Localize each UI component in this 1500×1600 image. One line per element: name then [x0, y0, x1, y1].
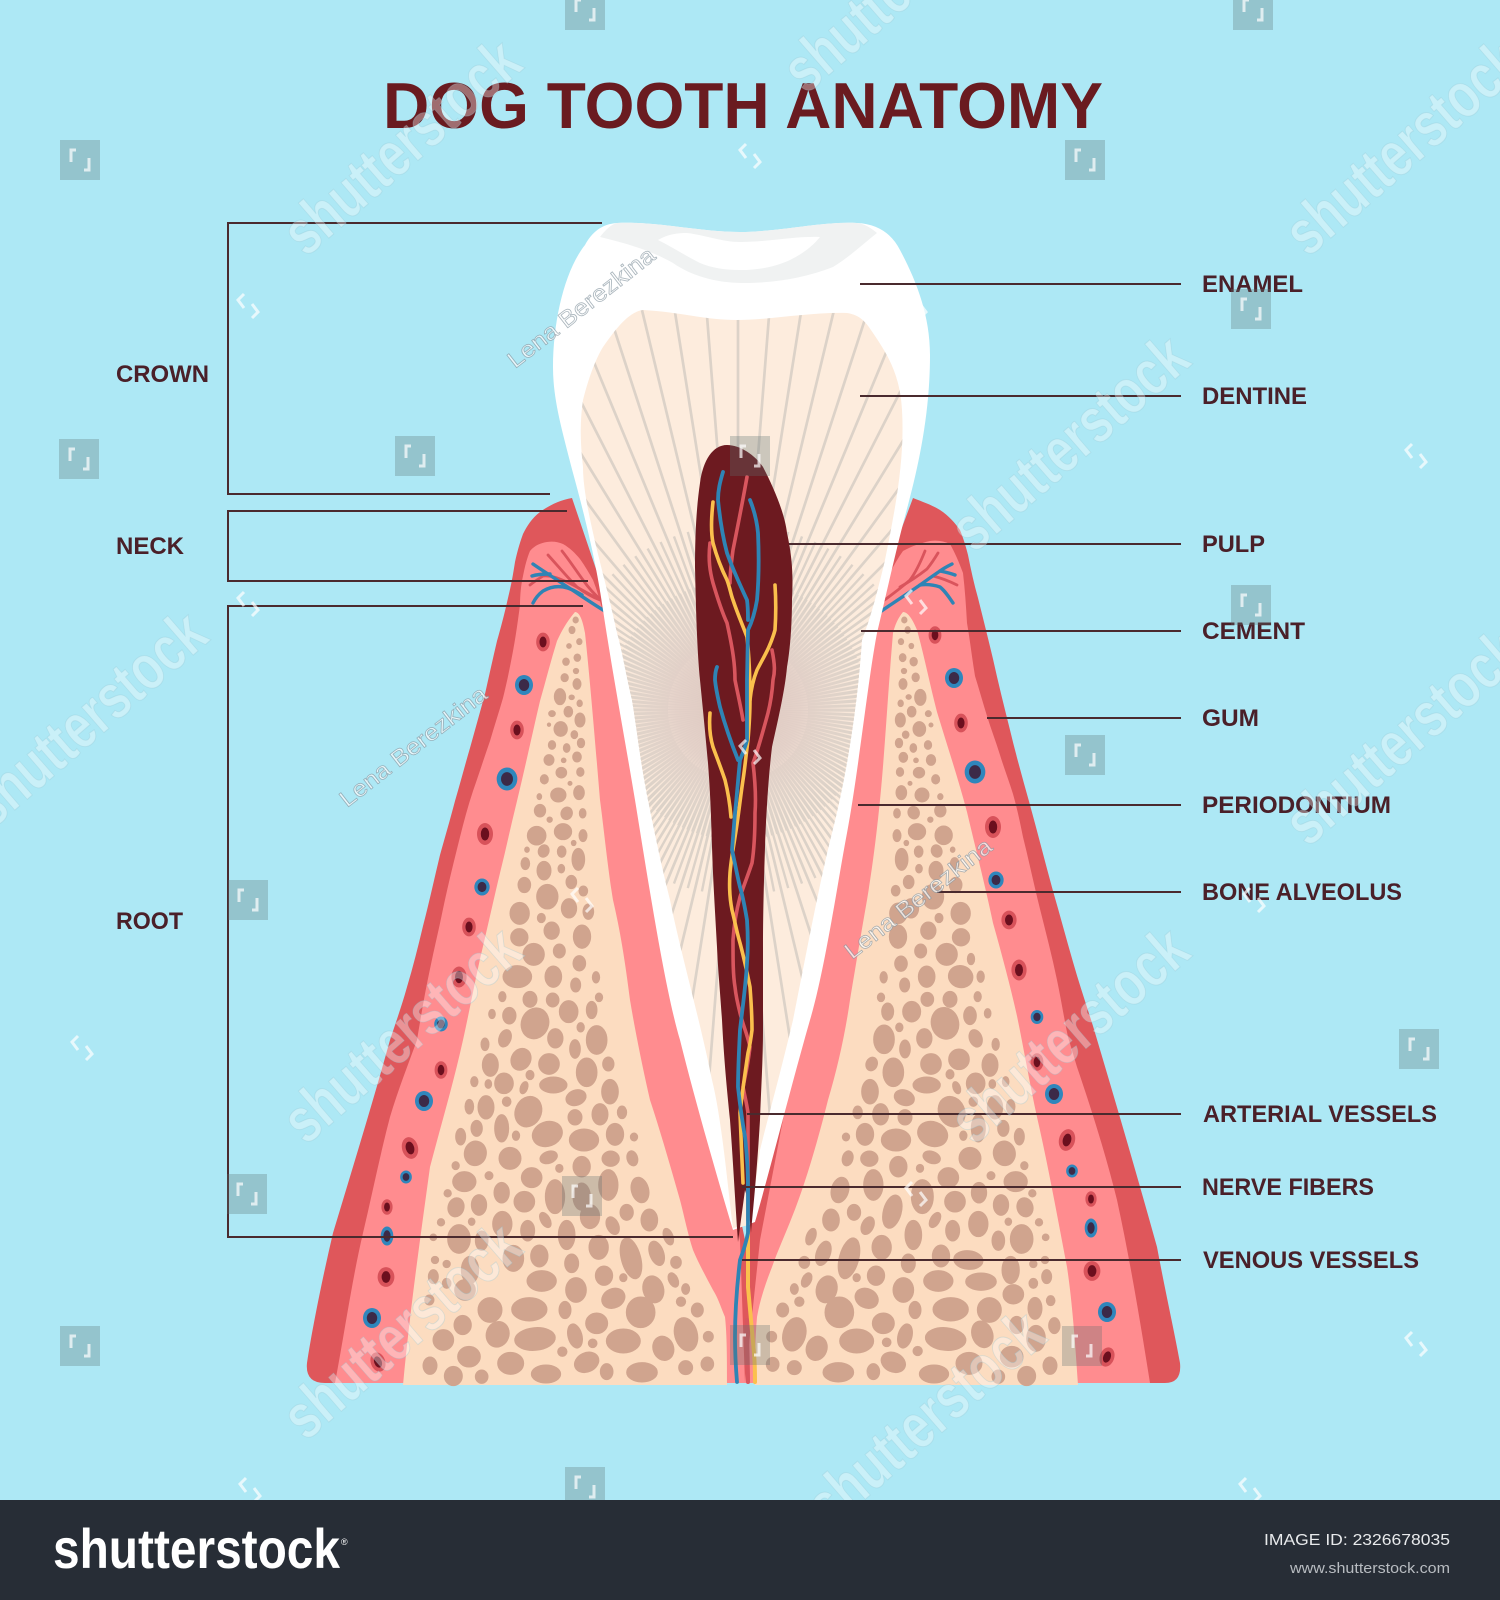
watermark overlay: shutterstock — [936, 320, 1202, 565]
title: DOG TOOTH ANATOMY — [383, 69, 1103, 142]
bracket: neck — [228, 511, 588, 581]
label: cement: CEMENT — [1202, 618, 1305, 645]
label: neck: NECK — [116, 533, 185, 560]
watermark overlay: shutterstock — [936, 912, 1202, 1157]
footer banner — [0, 1500, 1500, 1600]
tooth enamel — [553, 223, 930, 1230]
bone alveolus right — [755, 612, 1078, 1385]
bone pores right upper — [878, 617, 984, 1007]
blood vessel dots left — [363, 633, 550, 1374]
bone pores left lower — [423, 1001, 713, 1385]
label: enamel: ENAMEL — [1202, 271, 1303, 298]
label: periodontium: PERIODONTIUM — [1202, 792, 1391, 819]
footer logo: shutterstock — [53, 1517, 341, 1580]
website: www.shutterstock.com — [1289, 1560, 1450, 1577]
watermark overlay: Lena Berezkina — [839, 832, 997, 964]
label: arterial vessels: ARTERIAL VESSELS — [1203, 1101, 1437, 1128]
blood vessel dots right — [929, 626, 1117, 1369]
arterial vessels — [709, 477, 774, 1382]
image id: IMAGE ID: 2326678035 — [1264, 1532, 1450, 1549]
label: pulp: PULP — [1202, 531, 1265, 558]
bone pores right lower — [767, 1002, 1060, 1385]
watermark overlay: shutterstock — [792, 1296, 1058, 1541]
dentine — [581, 310, 903, 1228]
label: nerve fibers: NERVE FIBERS — [1202, 1174, 1374, 1201]
label: dentine: DENTINE — [1202, 383, 1307, 410]
label: bone alveolus: BONE ALVEOLUS — [1202, 879, 1402, 906]
gum vessels left — [530, 551, 603, 610]
periodontium left — [335, 542, 745, 1383]
watermark overlay: Lena Berezkina — [334, 680, 492, 812]
bracket: root — [228, 606, 733, 1237]
pulp — [695, 445, 792, 1242]
leader lines — [742, 284, 1181, 1260]
gum outer layer right — [745, 498, 1180, 1383]
footer logo registered mark: ® — [341, 1537, 348, 1547]
watermark overlay: shutterstock — [268, 1208, 534, 1453]
label: root: ROOT — [116, 908, 183, 935]
label: venous vessels: VENOUS VESSELS — [1203, 1247, 1419, 1274]
bone pores left upper — [499, 617, 602, 1007]
watermark overlay: Lena Berezkina — [502, 241, 660, 373]
gum outer layer left — [307, 498, 745, 1383]
label: gum: GUM — [1202, 705, 1259, 732]
periodontium right — [745, 541, 1150, 1383]
venous vessels — [715, 472, 759, 1382]
dentine tubules — [582, 310, 902, 1228]
bone alveolus left — [403, 612, 727, 1385]
bracket: crown — [228, 223, 602, 494]
watermark overlay: shutterstock — [268, 912, 534, 1157]
gum vessels right — [880, 551, 957, 612]
nerve fibers — [710, 502, 776, 1382]
label: crown: CROWN — [116, 361, 209, 388]
crown shading — [600, 223, 877, 283]
crown highlight — [658, 233, 820, 270]
